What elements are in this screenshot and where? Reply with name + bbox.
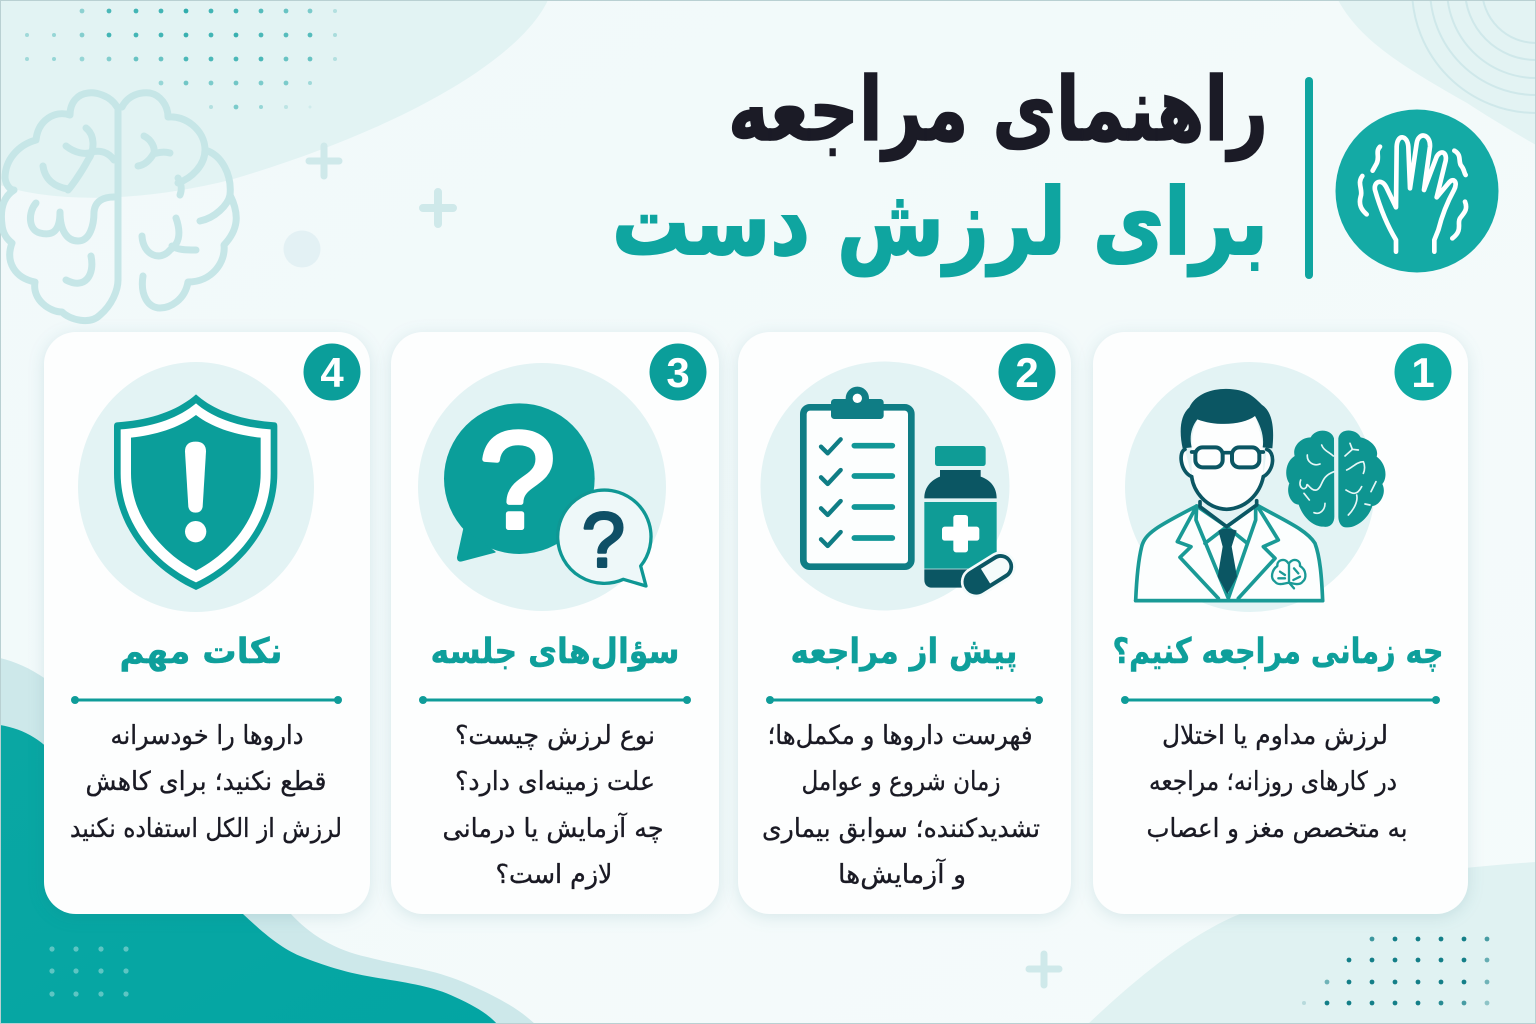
badge 1: 1: [1411, 349, 1435, 396]
card 2 heading: پیش از مراجعه: [790, 632, 1018, 672]
card 2 body text: و آزمایش‌ها: [838, 858, 966, 890]
card 1 body text: [1146, 721, 1408, 844]
icon: doctor: [1136, 389, 1323, 601]
card 3 heading: سؤال‌های جلسه: [430, 632, 680, 672]
card 2 body text: تشدیدکننده؛ سوابق بیماری: [762, 814, 1040, 844]
card 1 body text: در کارهای روزانه؛ مراجعه: [1149, 767, 1397, 797]
card 3 divider: [419, 696, 691, 704]
title line 1: راهنمای مراجعه: [728, 58, 1268, 161]
card 1 heading: چه زمانی مراجعه کنیم؟: [1112, 632, 1444, 672]
card 3 body text: لازم است؟: [496, 860, 612, 890]
icon circle background: [418, 363, 666, 611]
panel: card 3 session questions: [391, 332, 719, 914]
card 3 body text: [442, 721, 664, 890]
card 2 body text: فهرست داروها و مکمل‌ها؛: [768, 721, 1032, 751]
badge 2: 2: [1015, 349, 1039, 396]
badge 4: [304, 344, 360, 400]
icon: question bubbles: ?: [479, 403, 555, 556]
card 4 heading: نکات مهم: [120, 632, 282, 672]
card 3 body text: علت زمینه‌ای دارد؟: [455, 767, 655, 797]
badge 3: 3: [666, 349, 690, 396]
icon circle background: [78, 362, 314, 612]
panel: card 1 when to visit: [1093, 332, 1468, 914]
icon: question bubbles: ?: [582, 498, 625, 584]
card 4 divider: [71, 696, 342, 704]
card 1 body text: لرزش مداوم یا اختلال: [1162, 721, 1388, 751]
card 2 body text: زمان شروع و عوامل: [802, 767, 1000, 797]
title divider bar: [1305, 77, 1313, 279]
card 3 body text: چه آزمایش یا درمانی: [442, 812, 664, 844]
panel: card 2 before the visit: [738, 332, 1071, 914]
badge 4: 4: [320, 349, 344, 396]
card 4 body text: قطع نکنید؛ برای کاهش: [86, 767, 326, 797]
badge 1: [1394, 344, 1452, 400]
card 4 body text: داروها را خودسرانه: [110, 721, 304, 751]
card 3 body text: نوع لرزش چیست؟: [455, 721, 655, 751]
icon: teal brain: [1286, 430, 1385, 527]
icon: question bubbles: [444, 403, 651, 586]
card 4 body text: لرزش از الکل استفاده نکنید: [70, 814, 342, 844]
title line 2: برای لرزش دست: [612, 169, 1268, 277]
badge 2: [998, 344, 1056, 400]
card 1 body text: به متخصص مغز و اعصاب: [1146, 814, 1408, 844]
icon: medicine bottle and pill: [924, 446, 1020, 601]
icon circle background: [760, 362, 1010, 610]
card 2 divider: [766, 696, 1043, 704]
icon: clipboard checklist: [803, 387, 911, 567]
icon: shaking hand: [1336, 110, 1498, 272]
icon: warning shield: [114, 394, 277, 590]
icon: decorative brain outline: [1, 93, 236, 321]
heading: title: [612, 58, 1268, 277]
panel: card 4 important notes: [44, 332, 370, 914]
card 2 body text: [762, 721, 1040, 890]
icon: small brain on coat: [1272, 560, 1305, 588]
card 1 divider: [1121, 696, 1440, 704]
badge 3: [650, 344, 706, 400]
card 4 body text: [70, 721, 342, 844]
icon circle background: [1125, 362, 1375, 612]
